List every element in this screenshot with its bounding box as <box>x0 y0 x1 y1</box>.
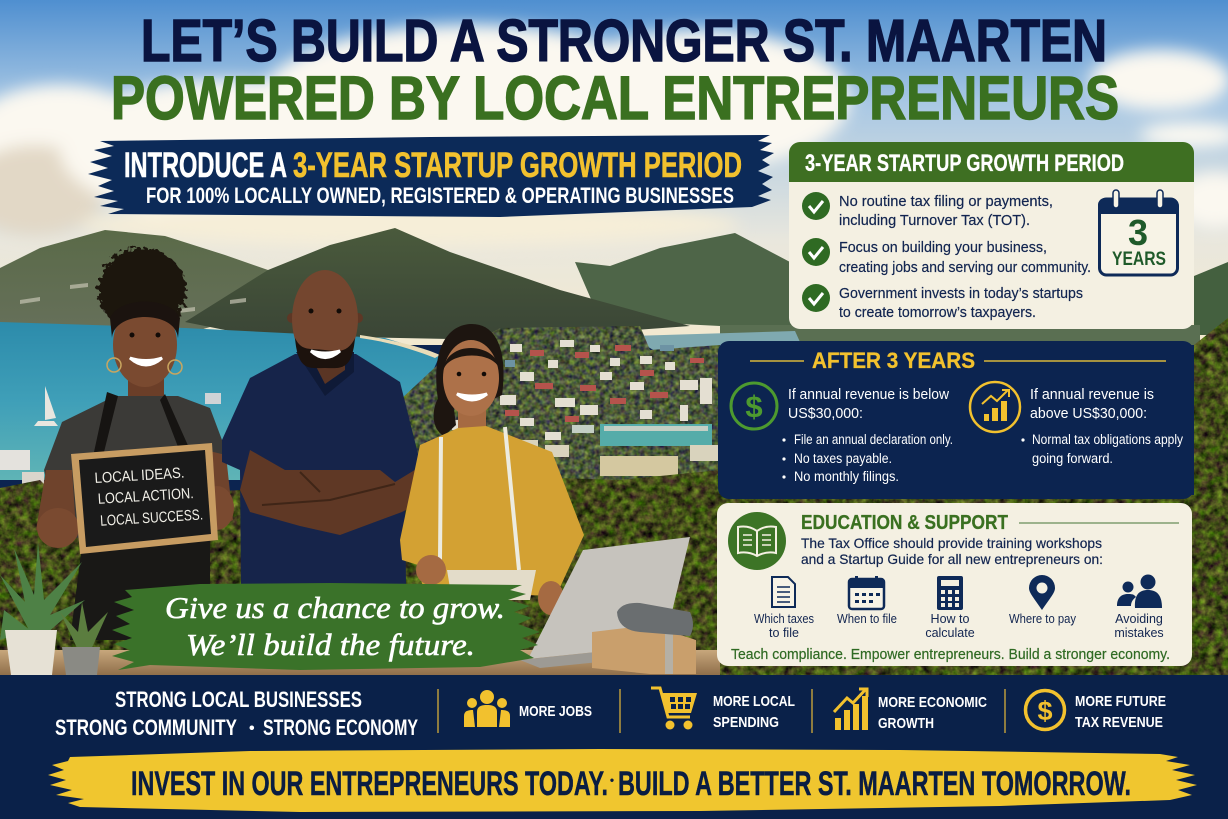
topic: where to pay: Where to pay <box>1009 612 1077 626</box>
benefit: more future tax revenue: MORE FUTURE <box>1075 693 1166 710</box>
benefit: more local spending: SPENDING <box>713 714 779 731</box>
topic: how to calculate <box>925 576 975 640</box>
yellow brush call to action <box>48 749 1197 812</box>
table <box>0 650 720 675</box>
title <box>111 8 1119 132</box>
coast strip between panels <box>720 325 1200 345</box>
sign text <box>94 464 204 530</box>
panel heading: 3-YEAR STARTUP GROWTH PERIOD <box>805 150 1124 177</box>
panel heading: AFTER 3 YEARS <box>812 348 975 373</box>
parcel <box>592 625 696 674</box>
slogan <box>55 687 418 740</box>
sign text: LOCAL SUCCESS. <box>100 507 204 530</box>
closing line: Teach compliance. Empower entrepreneurs. Build a stronger economy. <box>731 646 1170 663</box>
benefit: more economic growth: GROWTH <box>878 715 934 732</box>
panel heading <box>789 142 1194 182</box>
panel: after 3 years <box>718 341 1194 499</box>
benefit: focus on business: Focus on building your business, <box>839 239 1047 256</box>
slogan: STRONG LOCAL BUSINESSES <box>115 687 362 712</box>
banner: introduce startup period: INTRODUCE A <box>124 146 287 185</box>
benefit: more economic growth <box>834 689 987 732</box>
beach <box>360 335 440 358</box>
callout: green brush quote: Give us a chance to grow. <box>165 590 505 625</box>
mountains <box>0 230 300 330</box>
benefit: more jobs: MORE JOBS <box>519 703 592 720</box>
column: below threshold: No monthly filings. <box>794 469 899 484</box>
slogan: STRONG COMMUNITY <box>55 715 237 740</box>
icon: potted plants <box>0 542 108 675</box>
topic: which taxes: Which taxes <box>754 612 814 626</box>
benefit: focus on business <box>802 238 1091 276</box>
topic: which taxes: to file <box>769 626 799 640</box>
icon: calendar 3 years: 3 <box>1128 212 1148 253</box>
banner: introduce startup period <box>88 135 774 217</box>
benefit: more local spending: MORE LOCAL <box>713 693 795 710</box>
topic: which taxes <box>754 577 814 640</box>
boats <box>34 386 221 426</box>
topic: how to calculate: How to <box>931 612 969 626</box>
sky <box>0 0 1228 345</box>
column: above threshold: above US$30,000: <box>1030 405 1147 422</box>
benefit: government invests: to create tomorrow’s taxpayers. <box>839 304 1036 321</box>
clouds <box>0 25 1228 247</box>
topic: avoiding mistakes: mistakes <box>1114 626 1164 640</box>
yellow brush call to action: • <box>610 773 614 787</box>
footer band <box>0 675 1228 819</box>
icon: calendar 3 years: YEARS <box>1112 249 1166 270</box>
column: above threshold: If annual revenue is <box>1030 386 1154 403</box>
banner: introduce startup period: FOR 100% LOCALLY OWNED, REGISTERED & OPERATING BUSINESSES <box>146 183 734 208</box>
column: below threshold: US$30,000: <box>788 405 863 422</box>
slogan: • <box>249 720 255 737</box>
callout: green brush quote <box>112 583 540 670</box>
icon: open book <box>728 512 786 570</box>
foliage foreground <box>0 470 730 675</box>
icon: calendar 3 years <box>1098 190 1178 275</box>
topic: avoiding mistakes <box>1114 574 1164 640</box>
column: below threshold: If annual revenue is below <box>788 386 949 403</box>
panel heading: EDUCATION & SUPPORT <box>801 512 1008 534</box>
benefit: more future tax revenue: $ <box>1037 696 1053 726</box>
column: below threshold: $ <box>745 389 763 424</box>
folded cloth <box>617 603 693 636</box>
slogan: STRONG ECONOMY <box>263 715 418 740</box>
benefit: government invests: Government invests in today’s startups <box>839 285 1083 302</box>
sign text: LOCAL IDEAS. <box>94 465 185 487</box>
benefit: government invests <box>802 284 1083 321</box>
person: woman with measuring tape <box>400 324 584 615</box>
benefit: more future tax revenue <box>1026 690 1166 731</box>
column: above threshold <box>970 382 1183 466</box>
benefit: more local spending <box>651 688 795 731</box>
intro text: and a Startup Guide for all new entrepreneurs on: <box>801 551 1103 567</box>
person: woman with apron holding sign <box>36 248 234 640</box>
column: above threshold: going forward. <box>1032 451 1113 466</box>
people group <box>36 248 584 640</box>
banner: introduce startup period: 3-YEAR STARTUP GROWTH PERIOD <box>293 146 742 185</box>
column: below threshold: File an annual declaration only. <box>794 432 953 447</box>
town <box>400 326 730 490</box>
topic: avoiding mistakes: Avoiding <box>1115 612 1163 626</box>
intro text: The Tax Office should provide training workshops <box>801 535 1102 551</box>
hill houses <box>20 283 246 314</box>
column: below threshold: No taxes payable. <box>794 451 892 466</box>
person: man with crossed arms <box>222 270 424 585</box>
column: above threshold: Normal tax obligations apply <box>1032 432 1183 447</box>
topic: when to file: When to file <box>837 612 897 626</box>
laptop and parcels <box>520 537 696 674</box>
intro text <box>801 535 1103 567</box>
callout: green brush quote: We’ll build the future. <box>186 627 475 662</box>
sea <box>0 322 440 480</box>
benefit: no routine tax filing: No routine tax filing or payments, <box>839 193 1053 210</box>
benefit: no routine tax filing: including Turnover Tax (TOT). <box>839 212 1030 229</box>
column: below threshold <box>731 383 953 484</box>
benefit: no routine tax filing <box>802 192 1053 229</box>
benefit: more future tax revenue: TAX REVENUE <box>1075 714 1163 731</box>
topic: when to file <box>837 576 897 626</box>
topic: where to pay <box>1009 575 1077 626</box>
panel: 3-year startup growth period <box>789 142 1194 329</box>
panel: education and support <box>717 503 1192 666</box>
icon: chalkboard sign <box>71 443 218 554</box>
sign text: LOCAL ACTION. <box>97 485 194 508</box>
yellow brush call to action: INVEST IN OUR ENTREPRENEURS TODAY. <box>131 765 608 803</box>
benefit: more jobs <box>464 690 592 727</box>
topic: how to calculate: calculate <box>925 626 975 640</box>
benefit: focus on business: creating jobs and serving our community. <box>839 259 1091 276</box>
benefit: more economic growth: MORE ECONOMIC <box>878 694 987 711</box>
